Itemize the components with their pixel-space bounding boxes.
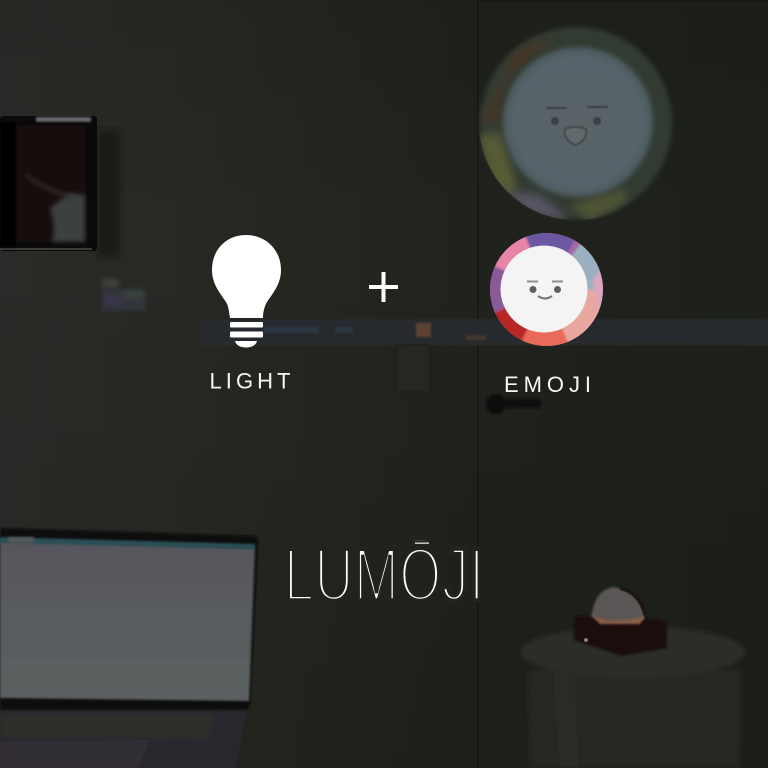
projected reflection on wall	[102, 279, 146, 311]
icon: emoji ball	[490, 233, 603, 346]
basket table	[521, 626, 745, 768]
label: light: LIGHT	[210, 368, 290, 394]
light switch	[397, 345, 430, 392]
logo wordmark: Lumoji: LUMŌJI	[284, 533, 484, 617]
projected emoji on door	[478, 27, 672, 222]
laptop	[0, 528, 258, 768]
wall monitor	[0, 116, 120, 258]
icon: light bulb	[212, 235, 281, 348]
door handle	[486, 394, 541, 414]
lumoji lamp	[574, 587, 667, 656]
label: emoji: EMOJI	[504, 372, 591, 397]
plus sign	[369, 272, 398, 302]
projected screen strip	[200, 319, 768, 345]
